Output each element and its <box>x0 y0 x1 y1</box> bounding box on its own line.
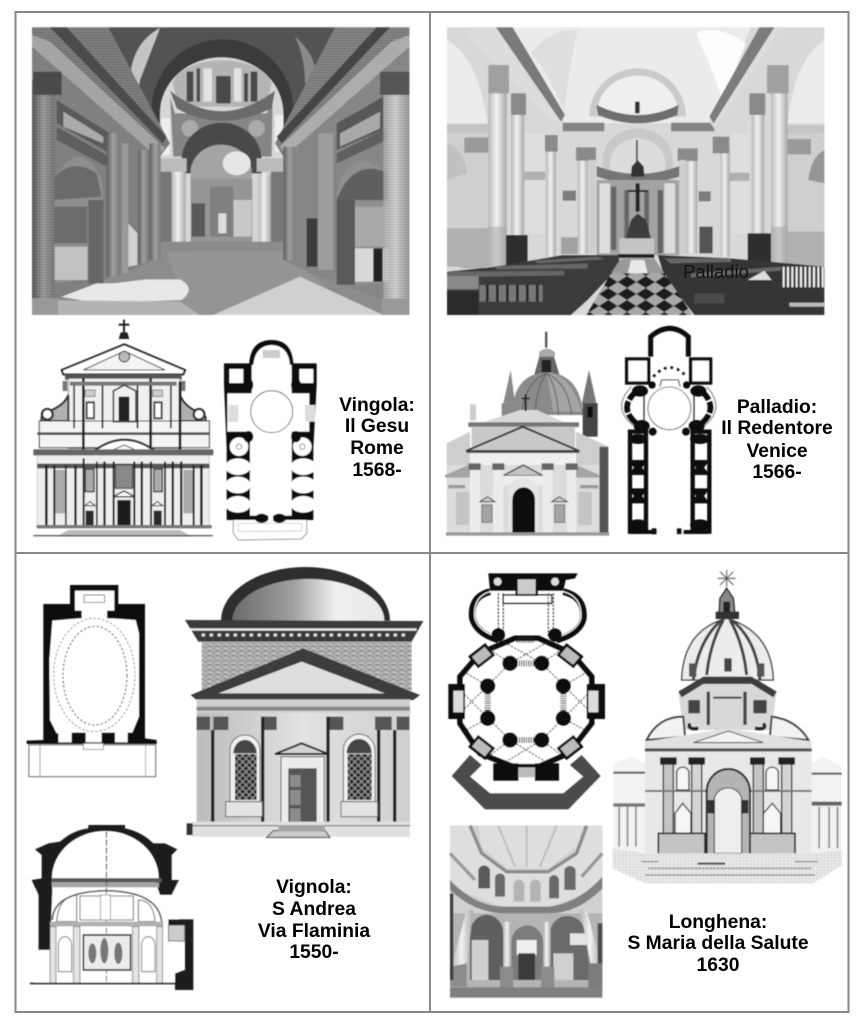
section drawing: S Andrea <box>30 825 193 990</box>
caption: Palladio Il Redentore <box>721 397 833 483</box>
engraving: interior of Il Gesu <box>32 27 409 315</box>
elevation drawing: S Maria della Salute <box>612 570 842 883</box>
caption: Palladio Il Redentore: Palladio: <box>737 397 817 418</box>
caption: Vingola Il Gesu: Il Gesu <box>345 416 409 437</box>
caption: Palladio Il Redentore: Il Redentore <box>721 418 833 439</box>
caption: Palladio Il Redentore: 1566- <box>752 462 802 483</box>
caption: Vingola Il Gesu: 1568- <box>352 460 402 481</box>
elevation: S Andrea facade <box>185 567 423 837</box>
caption: Vignola S Andrea: S Andrea <box>272 899 356 920</box>
caption: Vignola S Andrea: Vignola: <box>276 877 352 898</box>
floor plan: S Andrea <box>27 585 157 777</box>
panel: S Andrea <box>27 567 423 990</box>
caption: Longhena S Maria della Salute <box>627 912 809 976</box>
caption: Vingola Il Gesu <box>339 395 415 481</box>
floor plan: Il Redentore <box>622 328 716 535</box>
photo: interior of Il Redentore <box>447 27 824 315</box>
elevation: Il Gesu facade <box>33 320 213 537</box>
caption: Vignola S Andrea <box>258 877 370 963</box>
panel: Il Gesu <box>32 27 415 540</box>
panel: S Maria della Salute <box>448 570 842 998</box>
panel: Il Redentore <box>445 27 833 536</box>
caption: Palladio Il Redentore: Venice <box>746 441 808 462</box>
caption: Longhena S Maria della Salute: S Maria della Salute <box>627 933 809 954</box>
elevation: Il Redentore facade <box>445 332 609 536</box>
caption: Vingola Il Gesu: Vingola: <box>339 395 415 416</box>
floor plan: S Maria della Salute <box>448 573 605 809</box>
caption: Vignola S Andrea: 1550- <box>289 942 339 963</box>
photo: interior of S Maria della Salute <box>450 826 602 998</box>
caption: Longhena S Maria della Salute: 1630 <box>697 955 739 976</box>
caption: Vingola Il Gesu: Rome <box>350 438 404 459</box>
photo overlay label: Palladio: Palladio <box>683 261 749 282</box>
floor plan: Il Gesu <box>224 340 317 540</box>
caption: Longhena S Maria della Salute: Longhena: <box>669 912 767 933</box>
caption: Vignola S Andrea: Via Flaminia <box>258 921 370 942</box>
